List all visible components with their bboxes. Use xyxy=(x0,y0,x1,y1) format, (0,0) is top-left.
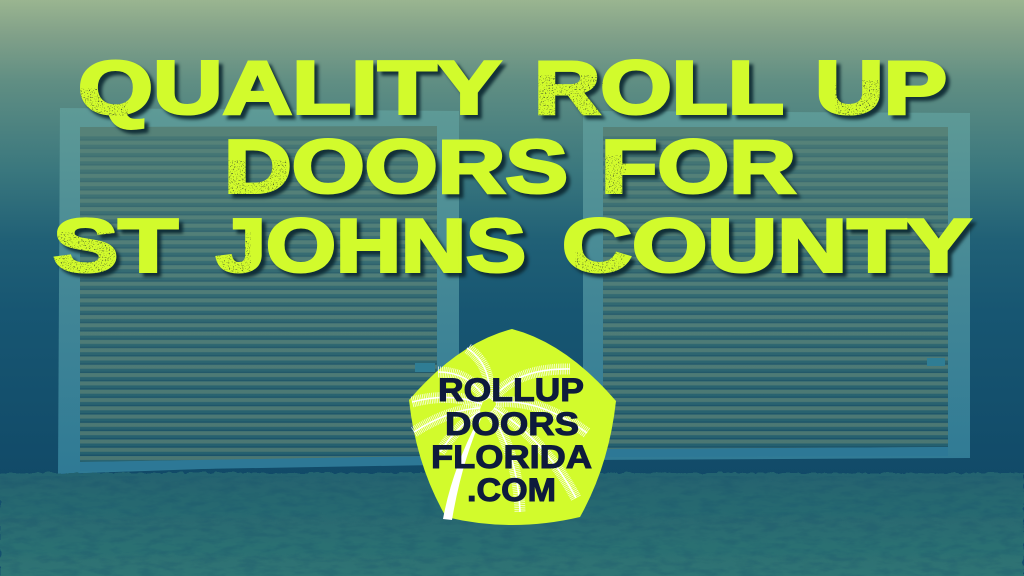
title: UP xyxy=(815,46,947,130)
left roll up door xyxy=(58,108,459,474)
logo text: .COM xyxy=(467,472,556,508)
title: FOR xyxy=(601,124,796,208)
badge shape: curved pentagon xyxy=(409,329,616,525)
title: ST xyxy=(53,204,178,288)
logo text: ROLLUP xyxy=(438,372,584,408)
grass foreground xyxy=(0,473,1024,576)
logo text: FLORIDA xyxy=(431,439,592,475)
title: JOHNS xyxy=(216,204,526,288)
icon: white palm tree xyxy=(412,348,587,520)
logo badge xyxy=(409,329,616,525)
title: DOORS xyxy=(224,124,568,208)
title: COUNTY xyxy=(562,204,971,288)
title: ROLL xyxy=(534,46,784,130)
logo text: DOORS xyxy=(445,406,579,442)
title xyxy=(53,46,971,288)
logo text xyxy=(431,372,592,508)
title: QUALITY xyxy=(78,46,501,130)
right roll up door xyxy=(583,111,970,460)
